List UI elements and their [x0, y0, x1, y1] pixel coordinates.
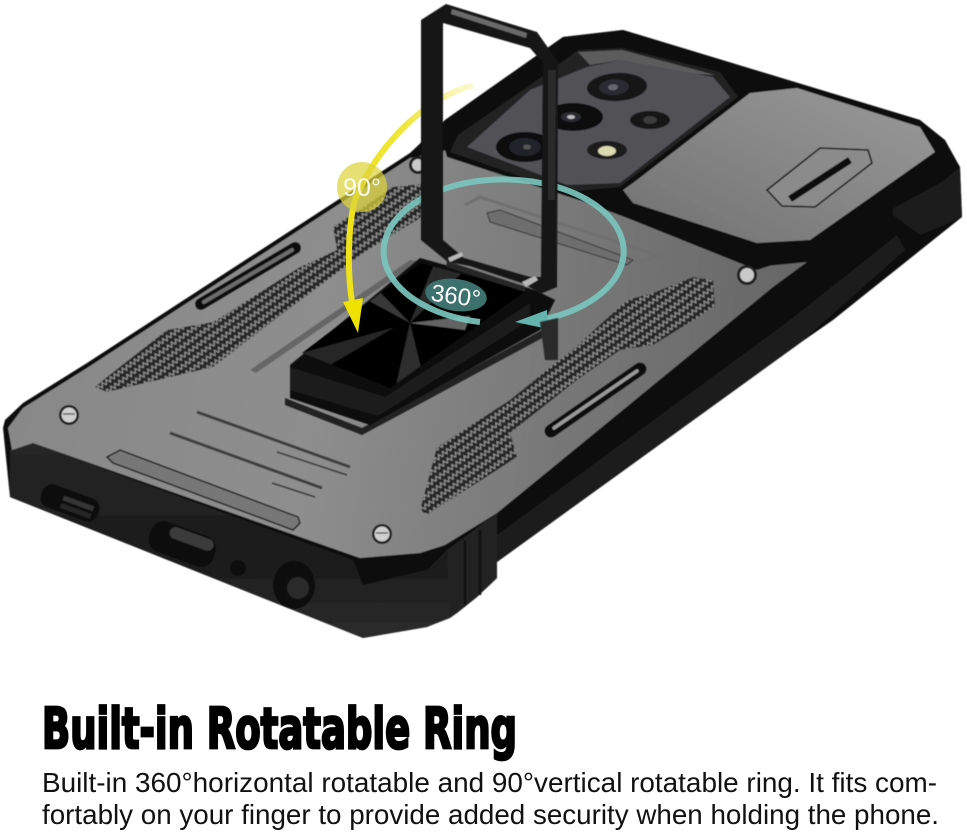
teal arc: [384, 179, 624, 322]
hinge clip left: [448, 252, 463, 262]
body text: fortably on your finger to provide added security when holding the phone.: [42, 799, 939, 830]
back plate: [8, 150, 807, 558]
camera slider cover: [623, 88, 935, 243]
body text: [42, 767, 939, 830]
upper recess groove: [487, 210, 633, 265]
speaker grille: [38, 481, 102, 525]
slider knob: [767, 148, 872, 207]
microphone hole: [230, 560, 246, 576]
brushed metal disc: [302, 262, 526, 390]
yellow 90 degree arrow: [337, 85, 473, 333]
base block: [290, 258, 555, 425]
flash: [587, 141, 627, 159]
headphone jack: [273, 561, 315, 609]
360 degree badge: 360°: [429, 280, 482, 313]
recess frame lines: [465, 197, 660, 262]
ring reflection: [540, 318, 558, 360]
ring frame: [421, 4, 558, 294]
yellow arc: [349, 85, 473, 302]
back plate long slot: [107, 450, 300, 530]
screw bottom right: [372, 524, 392, 544]
teal arrowhead: [515, 310, 548, 329]
90 degree badge: [337, 162, 387, 212]
right side button: [551, 369, 640, 431]
camera glass panel: [467, 60, 730, 185]
corner side ridge block: [447, 513, 497, 618]
right side wall panel: [497, 235, 905, 562]
ring right bar sheen: [548, 70, 556, 200]
body text: Built-in 360°horizontal rotatable and 90°vertical rotatable ring. It fits com-: [42, 767, 937, 798]
bottom side wall: [10, 443, 450, 638]
back plate grooves: [170, 412, 350, 497]
lens middle: [543, 103, 603, 131]
lens bottom left: [496, 132, 554, 162]
camera rim top band: [578, 50, 715, 75]
right top side ridge block: [893, 150, 962, 235]
lens top: [586, 71, 648, 103]
teal 360 degree arrow: [384, 179, 624, 329]
right grip texture: [420, 277, 715, 515]
left side button: [201, 248, 295, 304]
ring top bar highlight: [451, 9, 527, 38]
yellow arrowhead: [343, 298, 363, 333]
base lip: [290, 303, 530, 416]
left grip texture: [95, 183, 433, 392]
case outer silhouette: [3, 30, 962, 638]
camera glass rim: [450, 48, 738, 192]
ring hinge bar: [446, 261, 526, 292]
screw top left: [409, 156, 427, 174]
ring holder base: [285, 258, 557, 435]
charging port: [145, 517, 220, 571]
base plinth line: [285, 322, 557, 435]
heading: Built-in Rotatable Ring: [42, 697, 517, 762]
screw right: [737, 265, 757, 285]
camera island base: [440, 30, 960, 270]
360 degree badge: [423, 275, 489, 315]
phone case: [3, 30, 962, 638]
rotating ring: [421, 4, 558, 360]
screw bottom left: [59, 405, 79, 425]
lens right: [630, 111, 670, 129]
hinge clip right: [522, 276, 538, 287]
90 degree badge: 90°: [343, 174, 381, 202]
screw recess rail: [250, 260, 419, 373]
